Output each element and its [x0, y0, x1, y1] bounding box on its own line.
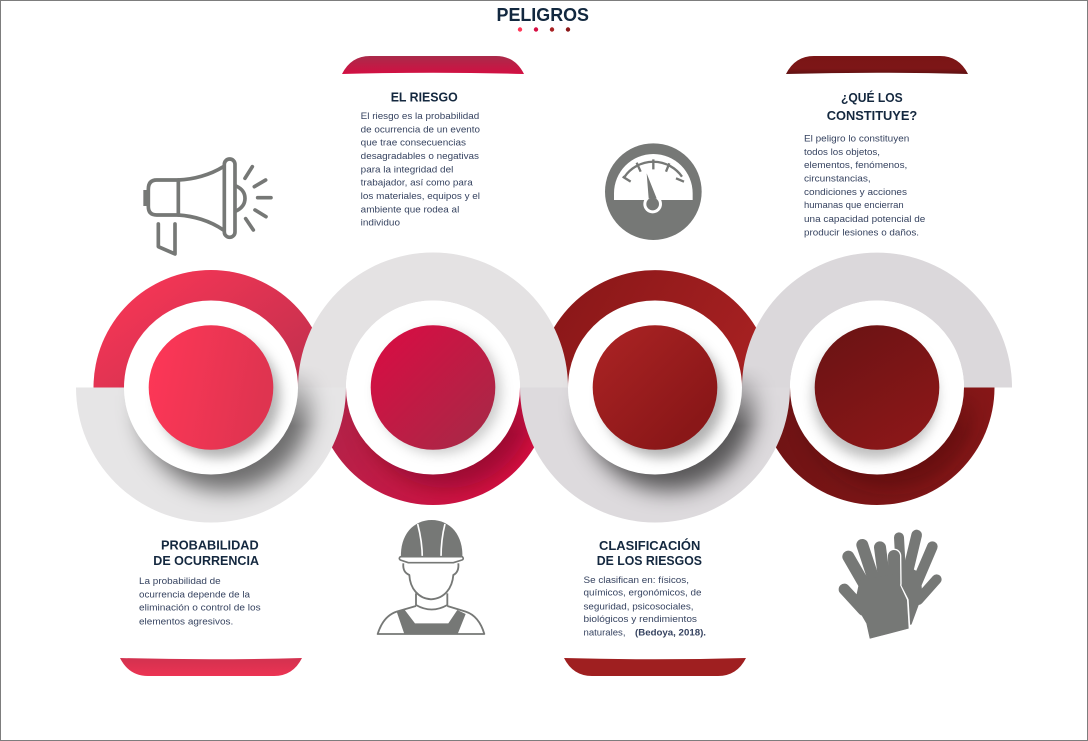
title: PELIGROS: [496, 4, 589, 25]
ribbon drop shadows: [125, 371, 769, 506]
text: clasificacion de los riesgos: seguridad, psicosociales,: [584, 601, 694, 611]
icon: megaphone: [143, 159, 271, 254]
gray S-shaped ribbon: [76, 252, 1012, 522]
text: que los constituye: humanas que encierran: [804, 200, 904, 210]
panel: que los constituye: [786, 56, 968, 237]
node 2: [346, 300, 520, 474]
text: el riesgo: [361, 111, 480, 228]
text: probabilidad de ocurrencia: ocurrencia depende de la: [139, 589, 250, 599]
icon: gauge: [605, 143, 702, 240]
heading: que los constituye: [827, 90, 917, 123]
icon: worker with helmet: [378, 520, 484, 634]
heading: clasificacion de los riesgos: DE LOS RIESGOS: [597, 553, 702, 568]
text: el riesgo: de ocurrencia de un evento: [361, 124, 480, 134]
heading: clasificacion de los riesgos: [597, 538, 702, 568]
text: que los constituye: [804, 134, 925, 237]
panel: clasificacion de los riesgos: [564, 538, 746, 676]
heading: que los constituye: CONSTITUYE?: [827, 108, 917, 123]
tab: probabilidad de ocurrencia: [120, 658, 302, 676]
tab: que los constituye: [786, 56, 968, 74]
text: que los constituye: El peligro lo constituyen: [804, 134, 909, 144]
text: que los constituye: circunstancias,: [804, 173, 871, 183]
text: probabilidad de ocurrencia: eliminación o control de los: [139, 603, 261, 613]
node 3: [568, 300, 742, 474]
tab: clasificacion de los riesgos: [564, 658, 746, 676]
heading: probabilidad de ocurrencia: DE OCURRENCIA: [153, 553, 260, 568]
text: el riesgo: para la integridad del: [361, 164, 453, 174]
heading: el riesgo: EL RIESGO: [391, 90, 458, 104]
node 4: [790, 300, 964, 474]
colored half rings: [94, 270, 994, 505]
text: clasificacion de los riesgos: (Bedoya, 2018).: [635, 627, 706, 637]
text: que los constituye: una capacidad potencial de: [804, 214, 925, 224]
text: probabilidad de ocurrencia: elementos agresivos.: [139, 616, 233, 626]
text: el riesgo: que trae consecuencias: [361, 138, 467, 148]
heading: probabilidad de ocurrencia: PROBABILIDAD: [161, 538, 259, 552]
text: el riesgo: trabajador, así como para: [361, 178, 473, 188]
heading: clasificacion de los riesgos: CLASIFICACIÓN: [599, 538, 700, 553]
text: clasificacion de los riesgos: biológicos y rendimientos: [584, 614, 698, 624]
text: que los constituye: todos los objetos,: [804, 147, 880, 157]
text: el riesgo: individuo: [361, 218, 400, 228]
heading: que los constituye: ¿QUÉ LOS: [841, 90, 903, 105]
text: que los constituye: condiciones y acciones: [804, 187, 908, 197]
panel: el riesgo: [342, 56, 524, 228]
node 1: [124, 300, 298, 474]
text: el riesgo: El riesgo es la probabilidad: [361, 111, 479, 121]
text: el riesgo: los materiales, equipos y el: [361, 191, 480, 201]
text: el riesgo: desagradables o negativas: [361, 151, 480, 161]
heading: probabilidad de ocurrencia: [153, 538, 260, 568]
text: que los constituye: elementos, fenómenos,: [804, 160, 907, 170]
text: probabilidad de ocurrencia: La probabilidad de: [139, 576, 221, 586]
text: que los constituye: producir lesiones o daños.: [804, 227, 919, 237]
text: clasificacion de los riesgos: químicos, ergonómicos, de: [584, 588, 702, 598]
panel: probabilidad de ocurrencia: [120, 538, 302, 676]
text: clasificacion de los riesgos: naturales,: [584, 627, 626, 637]
tab: el riesgo: [342, 56, 524, 74]
text: clasificacion de los riesgos: Se clasifican en: físicos,: [584, 575, 689, 585]
text: clasificacion de los riesgos: [584, 575, 706, 637]
icon: gloves: [844, 535, 937, 638]
text: probabilidad de ocurrencia: [139, 576, 261, 626]
text: el riesgo: ambiente que rodea al: [361, 204, 459, 214]
